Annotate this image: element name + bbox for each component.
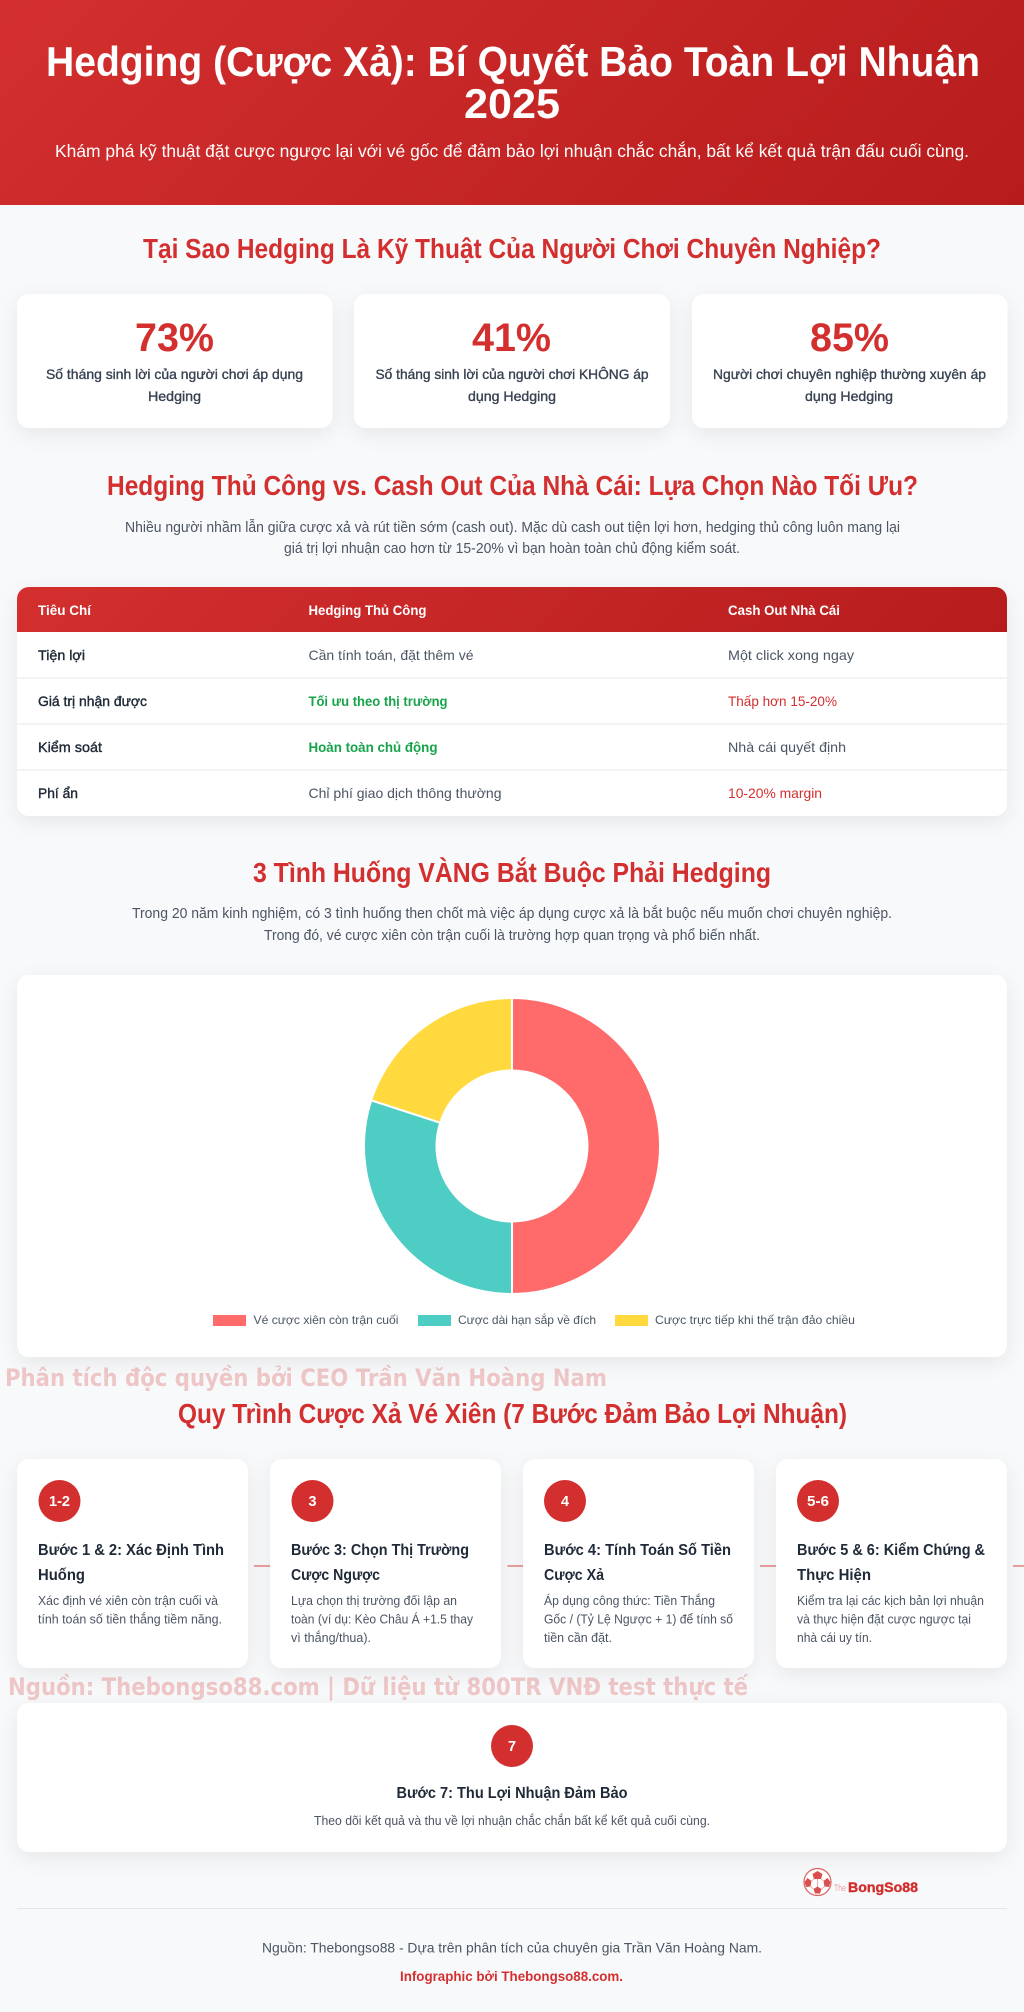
title: 2025 xyxy=(464,80,560,127)
step card 3: toàn (ví dụ: Kèo Châu Á +1.5 thay xyxy=(291,1612,474,1626)
arrow connector xyxy=(254,1565,270,1567)
stat card 73% xyxy=(17,294,332,428)
logo: TheBongSo88 xyxy=(804,1868,919,1896)
step card 1-2 xyxy=(17,1459,248,1668)
row: value: Giá trị nhận được xyxy=(38,693,147,709)
row: hidden fees: Chỉ phí giao dịch thông thường xyxy=(308,785,502,801)
source line: Nguồn: Thebongso88 - Dựa trên phân tích của chuyên gia Trần Văn Hoàng Nam. xyxy=(262,1940,762,1956)
step card 5-6: 5-6 xyxy=(807,1494,829,1510)
watermark: source: Nguồn: Thebongso88.com | Dữ liệu từ 800TR VNĐ test thực tế xyxy=(8,1673,749,1701)
stat card 41%: Số tháng sinh lời của người chơi KHÔNG áp xyxy=(376,366,649,382)
stat card 85%: dụng Hedging xyxy=(805,388,893,404)
stat card 41%: 41% xyxy=(472,316,551,360)
row: control: Nhà cái quyết định xyxy=(728,739,846,755)
step card 3 xyxy=(270,1459,501,1668)
step card 1-2: Huống xyxy=(38,1567,85,1584)
title xyxy=(46,38,980,127)
panel: donut chart xyxy=(17,975,1007,1357)
step card 4: Cược Xả xyxy=(544,1567,604,1584)
step card 4: Bước 4: Tính Toán Số Tiền xyxy=(544,1542,731,1559)
step card 7: Bước 7: Thu Lợi Nhuận Đảm Bảo xyxy=(396,1785,628,1802)
table header row xyxy=(38,602,840,618)
table header row: Hedging Thủ Công xyxy=(308,602,426,618)
credit line: Infographic bởi Thebongso88.com. xyxy=(400,1968,623,1984)
intro paragraph: situations xyxy=(132,905,892,944)
row: control: Hoàn toàn chủ động xyxy=(308,739,438,755)
step card 3: Bước 3: Chọn Thị Trường xyxy=(291,1542,469,1559)
chart legend xyxy=(213,1312,855,1327)
row: value: Thấp hơn 15-20% xyxy=(728,693,837,709)
stat card 41% xyxy=(354,294,670,428)
row: hidden fees xyxy=(38,785,822,801)
step card 1-2: Bước 1 & 2: Xác Định Tình xyxy=(38,1542,224,1559)
step card 4 xyxy=(523,1459,754,1668)
heading: 3 golden situations: 3 Tình Huống VÀNG Bắt Buộc Phải Hedging xyxy=(253,857,771,888)
step card 3: Cược Ngược xyxy=(291,1567,380,1584)
step card 7: Theo dõi kết quả và thu về lợi nhuận chắc chắn bất kể kết quả cuối cùng. xyxy=(314,1813,710,1828)
table header row: Cash Out Nhà Cái xyxy=(728,602,840,618)
step card 1-2: 1-2 xyxy=(49,1494,70,1510)
row: control xyxy=(38,739,846,755)
arrow connector xyxy=(760,1565,776,1567)
chart legend: Cược trực tiếp khi thế trận đảo chiều xyxy=(655,1313,855,1327)
row: convenience: Cần tính toán, đặt thêm vé xyxy=(308,647,474,663)
step card 4: Gốc / (Tỷ Lệ Ngược + 1) để tính số xyxy=(544,1612,733,1626)
step card 7 xyxy=(17,1703,1007,1852)
chart legend: Cược dài hạn sắp về đích xyxy=(458,1312,596,1327)
stat card 85%: 85% xyxy=(810,316,889,360)
step card 3: Lựa chọn thị trường đối lập an xyxy=(291,1594,457,1608)
stat card 73%: Số tháng sinh lời của người chơi áp dụng xyxy=(46,366,303,382)
step card 5-6: Kiểm tra lại các kịch bản lợi nhuận xyxy=(797,1594,984,1608)
intro paragraph: situations: Trong 20 năm kinh nghiệm, có 3 tình huống then chốt mà việc áp dụng cược xả là bắt buộc nếu muốn chơi chuyên nghiệp. xyxy=(132,905,892,922)
chart legend: Vé cược xiên còn trận cuối xyxy=(254,1313,398,1327)
arrow connector xyxy=(508,1565,524,1567)
row: control: Kiểm soát xyxy=(38,739,102,755)
header banner xyxy=(0,0,1024,205)
step card 4: Áp dụng công thức: Tiền Thắng xyxy=(544,1593,715,1608)
step card 3: 3 xyxy=(308,1494,316,1510)
stat card 73%: Hedging xyxy=(148,388,201,404)
step card 7: 7 xyxy=(508,1739,516,1755)
footer xyxy=(17,1908,1007,1984)
arrow connector xyxy=(1013,1565,1024,1567)
donut chart xyxy=(364,998,660,1294)
step card 1-2: tính toán số tiền thắng tiềm năng. xyxy=(38,1612,222,1626)
intro paragraph: cash out xyxy=(125,519,900,557)
stat card 41%: dụng Hedging xyxy=(468,388,556,404)
intro paragraph: cash out: giá trị lợi nhuận cao hơn từ 15-20% vì bạn hoàn toàn chủ động kiểm soát. xyxy=(284,541,740,557)
table header row: Tiêu Chí xyxy=(38,602,92,618)
step card 4: tiền cần đặt. xyxy=(544,1631,612,1645)
watermark: analysis credit: Phân tích độc quyền bởi CEO Trần Văn Hoàng Nam xyxy=(5,1364,607,1392)
row: convenience: Một click xong ngay xyxy=(728,647,854,663)
row: hidden fees: Phí ẩn xyxy=(38,785,78,801)
step card 3: vì thắng/thua). xyxy=(291,1630,371,1645)
logo: TheBongSo88: BongSo88 xyxy=(848,1880,919,1895)
step card 5-6: và thực hiện đặt cược ngược tại xyxy=(797,1612,971,1626)
step card 4: 4 xyxy=(561,1494,569,1510)
intro paragraph: cash out: Nhiều người nhầm lẫn giữa cược xả và rút tiền sớm (cash out). Mặc dù cash out tiện lợi hơn, hedging thủ công luôn mang lại xyxy=(125,519,900,536)
row: value: Tối ưu theo thị trường xyxy=(308,693,448,709)
step card 1-2: Xác định vé xiên còn trận cuối và xyxy=(38,1594,218,1608)
step card 5-6: Thực Hiện xyxy=(797,1567,871,1584)
intro paragraph: situations: Trong đó, vé cược xiên còn trận cuối là trường hợp quan trọng và phổ biến nhất. xyxy=(264,928,760,944)
icon: soccer ball xyxy=(804,1868,831,1896)
row: convenience xyxy=(38,647,854,663)
step card 5-6: Bước 5 & 6: Kiểm Chứng & xyxy=(797,1541,985,1559)
subtitle: Khám phá kỹ thuật đặt cược ngược lại với vé gốc để đảm bảo lợi nhuận chắc chắn, bất kể kết quả trận đấu cuối cùng. xyxy=(55,140,969,161)
comparison table xyxy=(17,587,1007,816)
row: value xyxy=(38,693,837,709)
stat card 85% xyxy=(692,294,1008,428)
stat card 85%: Người chơi chuyên nghiệp thường xuyên áp xyxy=(713,366,986,382)
heading: why hedging: Tại Sao Hedging Là Kỹ Thuật Của Người Chơi Chuyên Nghiệp? xyxy=(143,233,881,264)
heading: 7 step process: Quy Trình Cược Xả Vé Xiên (7 Bước Đảm Bảo Lợi Nhuận) xyxy=(178,1398,847,1429)
title: Hedging (Cược Xả): Bí Quyết Bảo Toàn Lợi Nhuận xyxy=(46,38,980,85)
heading: manual hedging vs cash out: Hedging Thủ Công vs. Cash Out Của Nhà Cái: Lựa Chọn Nào Tối Ưu? xyxy=(107,470,918,501)
row: hidden fees: 10-20% margin xyxy=(728,785,822,801)
logo: TheBongSo88: The xyxy=(834,1883,846,1893)
step card 5-6: nhà cái uy tín. xyxy=(797,1631,872,1645)
row: convenience: Tiện lợi xyxy=(38,647,85,663)
step card 5-6 xyxy=(776,1459,1007,1668)
stat card 73%: 73% xyxy=(135,316,214,360)
